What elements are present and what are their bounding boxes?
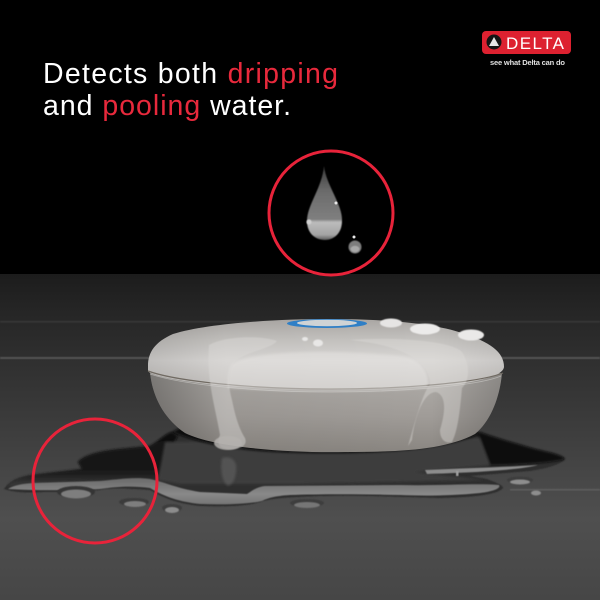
floor bbox=[0, 274, 600, 600]
water drop small bbox=[348, 236, 362, 254]
puddle interior bbox=[158, 438, 490, 484]
Delta logo: DELTA bbox=[506, 34, 565, 53]
reflection under device bbox=[221, 457, 236, 486]
red circle: pooling water bbox=[33, 419, 157, 543]
water beads on device bbox=[380, 318, 484, 340]
red circle: dripping water bbox=[269, 151, 393, 275]
blue status ring bbox=[287, 319, 367, 328]
headline bbox=[43, 58, 338, 122]
puddle dark shadow right bbox=[478, 432, 565, 465]
headline: Detects both dripping bbox=[43, 58, 338, 90]
puddle of water bbox=[4, 428, 565, 506]
puddle rim front bbox=[8, 478, 499, 504]
water drop large bbox=[307, 166, 342, 240]
puddle dark shadow left bbox=[8, 432, 178, 486]
puddle body bbox=[4, 432, 565, 506]
water sensor device bbox=[148, 318, 504, 452]
Delta logo: see what Delta can do bbox=[490, 58, 565, 67]
puddle rim right bbox=[425, 465, 538, 474]
shadow under device bbox=[172, 428, 480, 453]
device seam bbox=[148, 371, 503, 389]
water film on device bbox=[208, 337, 468, 450]
device upper shell bbox=[148, 319, 504, 389]
headline: and pooling water. bbox=[43, 90, 291, 122]
logo icon bbox=[486, 34, 502, 50]
device lower shell bbox=[150, 372, 502, 452]
Delta logo bbox=[482, 31, 571, 67]
small droplets on floor bbox=[57, 476, 541, 513]
